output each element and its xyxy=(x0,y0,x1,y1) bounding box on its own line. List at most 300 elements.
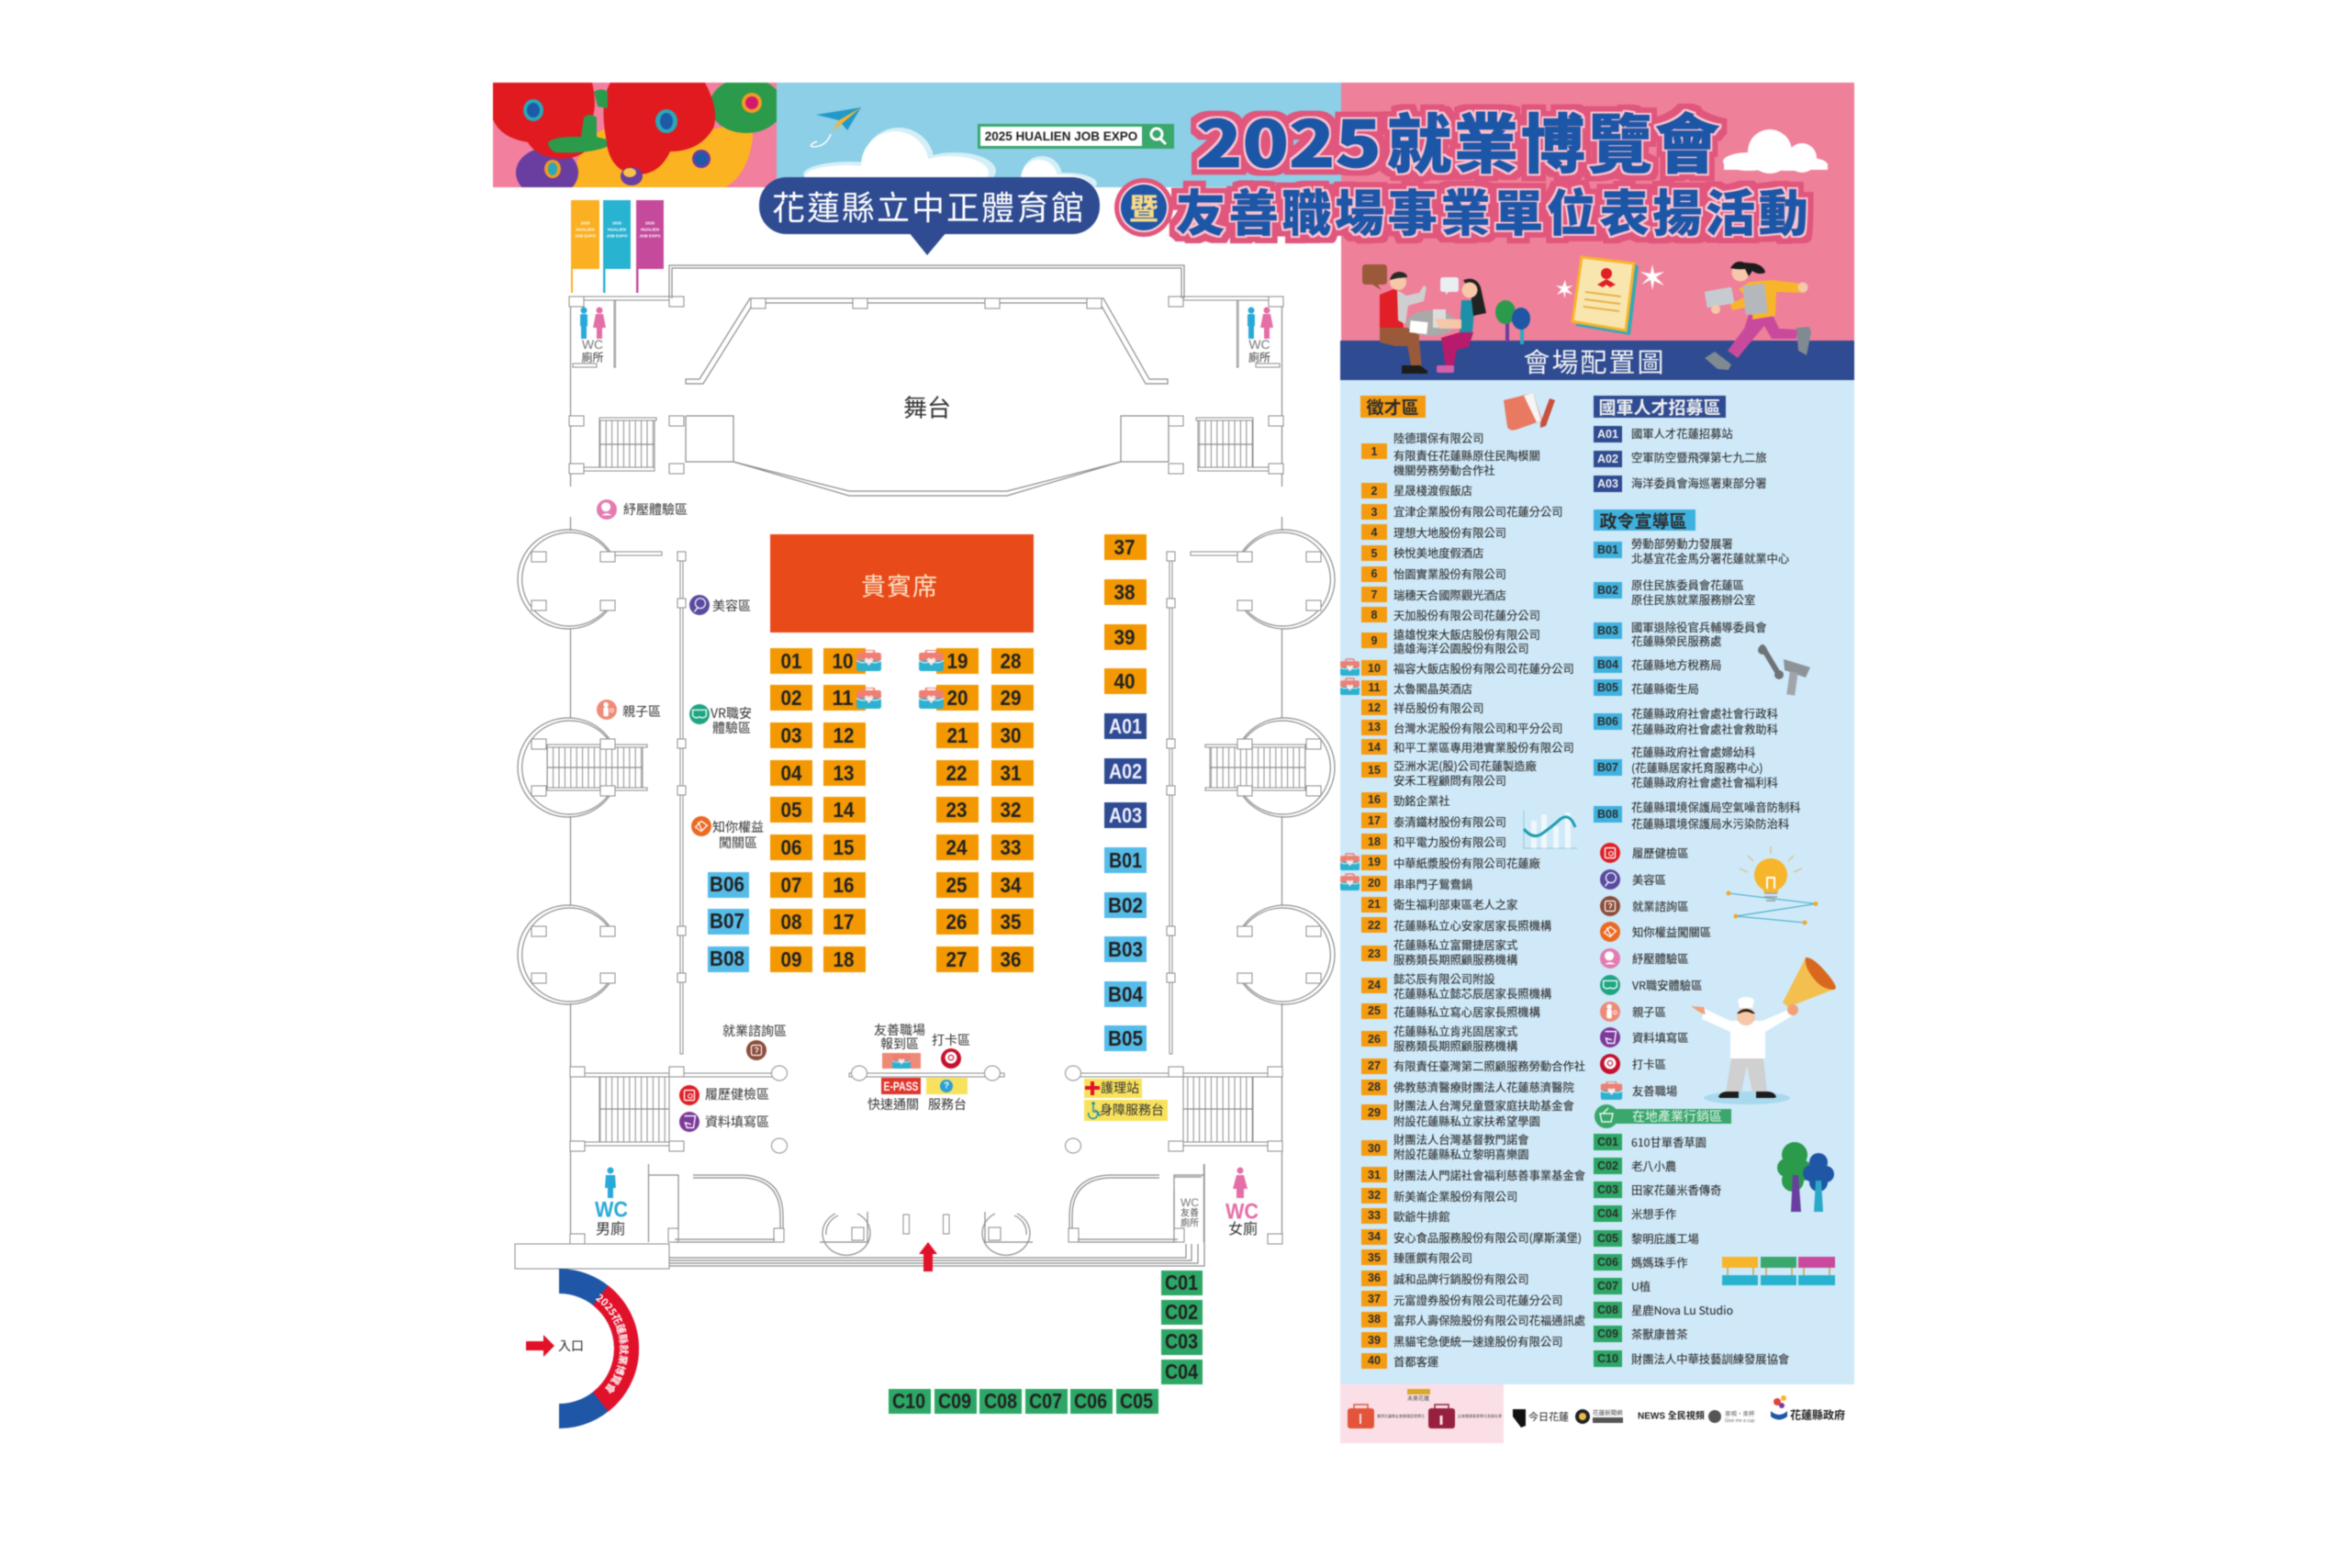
booths: column 3: 27 xyxy=(946,947,968,971)
booths: right column: A01 xyxy=(1109,714,1142,738)
VIP area xyxy=(770,534,1034,633)
title badge: 暨 xyxy=(1129,186,1158,229)
icon: clouds xyxy=(803,128,1097,199)
legend: rights: 知你權益闖關區 xyxy=(1632,924,1711,940)
company row 38: 富邦人壽保險股份有限公司花福通訊處 xyxy=(1393,1312,1585,1328)
front service counter xyxy=(849,1066,1004,1081)
company row 37: 37 xyxy=(1368,1293,1381,1305)
company row 6: 6 xyxy=(1371,567,1378,580)
flags: HUALIEN xyxy=(576,228,595,231)
navy band: 會場配置圖 xyxy=(1523,342,1666,380)
row B07: (花蓮縣居家托育服務中心) xyxy=(1631,759,1763,776)
flags: 2025 xyxy=(645,220,655,226)
icon label: check in xyxy=(932,1031,970,1069)
logo: NEWS: NEWS 全民視頻 xyxy=(1638,1410,1705,1421)
company row 24: 花蓮縣私立懿芯辰居家長照機構 xyxy=(1393,985,1551,1002)
row C09 xyxy=(1594,1326,1687,1342)
logo: give me a cup: 來唄・來杯 xyxy=(1725,1408,1755,1417)
booths: column 2: 14 xyxy=(834,798,855,822)
icon label: relax xyxy=(597,499,688,520)
legend: parent child: 親子區 xyxy=(1632,1003,1666,1020)
company row 25: 花蓮縣私立寫心居家長照機構 xyxy=(1393,1003,1540,1020)
booths: market horizontal: C09 xyxy=(938,1389,971,1413)
booths: column 4: 35 xyxy=(1001,910,1022,934)
icon: folder and pencil xyxy=(1504,393,1555,431)
legend: form: 資料填寫區 xyxy=(1632,1029,1689,1046)
icon: light bulb xyxy=(1726,846,1818,925)
booths: column 3: 23 xyxy=(946,798,968,822)
E-PASS: 快速通關 xyxy=(867,1095,919,1114)
icon label: parent child: 親子區 xyxy=(622,702,661,721)
booths: right column: 37 xyxy=(1114,535,1135,559)
company row 26: 26 xyxy=(1368,1033,1381,1046)
E-PASS xyxy=(867,1078,921,1114)
company row 9: 9 xyxy=(1371,634,1378,647)
booths: right column: 39 xyxy=(1114,625,1135,649)
company row 9: 遠雄悅來大飯店股份有限公司 xyxy=(1393,626,1540,643)
panel: list background xyxy=(1340,380,1854,1384)
heading: recruiting zone: 徵才區 xyxy=(1366,395,1419,419)
logo: give me a cup xyxy=(1708,1408,1755,1424)
row C06: 媽媽珠手作 xyxy=(1631,1254,1687,1271)
flags xyxy=(571,200,664,293)
company row 8: 天加股份有限公司花蓮分公司 xyxy=(1393,607,1540,623)
company row 4: 4 xyxy=(1371,526,1378,539)
company row 28: 28 xyxy=(1368,1081,1381,1093)
booths: right column: B01 xyxy=(1109,848,1142,872)
company row 18: 18 xyxy=(1368,835,1381,848)
company row 22: 22 xyxy=(1368,919,1381,932)
row B06: 花蓮縣政府社會處社會行政科 xyxy=(1631,705,1778,722)
booths: column 4: 33 xyxy=(1001,835,1021,859)
company row 24: 懿芯辰有限公司附設 xyxy=(1393,970,1495,987)
company row 12: 12 xyxy=(1368,701,1381,714)
booths: right column: 38 xyxy=(1114,580,1136,604)
row C05 xyxy=(1594,1230,1699,1247)
company row 11: 11 xyxy=(1368,681,1381,694)
row B01: 勞動部勞動力發展署 xyxy=(1631,535,1733,552)
booths: column 1: 06 xyxy=(780,835,802,859)
illustration: running woman xyxy=(1705,262,1811,370)
icon: WC top right xyxy=(1248,307,1273,339)
booths: column 3: 24 xyxy=(946,835,968,859)
icon: wrench and bolt xyxy=(1758,645,1810,696)
legend: friendly workplace: 友善職場 xyxy=(1632,1082,1677,1099)
title line 1: 就業博覽會 xyxy=(1387,94,1722,185)
company row 36: 誠和品牌行銷股份有限公司 xyxy=(1393,1271,1529,1287)
accessible restroom label xyxy=(1181,1196,1199,1228)
booths: column 3: 20 xyxy=(947,686,968,710)
booths: column 2: 12 xyxy=(834,723,854,747)
label: WC top left: 廁所 xyxy=(581,349,604,365)
booths: column 2: 11 xyxy=(832,686,854,710)
logo: Hualien News: 花蓮新聞網 xyxy=(1593,1407,1623,1417)
company row 11 xyxy=(1340,678,1472,697)
entrance arrow xyxy=(919,1242,937,1271)
row B03: 國軍退除役官兵輔導委員會 xyxy=(1631,619,1767,635)
company row 26: 花蓮縣私立肯兆固居家式 xyxy=(1393,1023,1517,1039)
company row 21: 衛生福利部東區老人之家 xyxy=(1393,896,1517,913)
company row 22: 花蓮縣私立心安家居家長照機構 xyxy=(1393,917,1551,934)
men's restroom xyxy=(595,1168,628,1238)
company row 29: 29 xyxy=(1368,1106,1381,1119)
search bar xyxy=(978,124,1174,149)
label: WC top right: 廁所 xyxy=(1248,349,1270,365)
logo: Hualien County Government xyxy=(1771,1395,1845,1423)
company row 1: 有限責任花蓮縣原住民陶模關 xyxy=(1393,447,1540,464)
company row 23: 服務類長期照顧服務機構 xyxy=(1393,951,1517,968)
company row 40: 首都客運 xyxy=(1393,1353,1438,1370)
row C03: 田家花蓮米香傳奇 xyxy=(1631,1182,1721,1198)
title badge xyxy=(1114,178,1173,237)
company row 32: 新美崙企業股份有限公司 xyxy=(1393,1188,1517,1204)
row C07 xyxy=(1594,1278,1651,1294)
icon label: rights: 知你權益 xyxy=(712,818,764,836)
row C01: C01 xyxy=(1597,1136,1618,1148)
company row 15 xyxy=(1361,757,1537,789)
illustration: consultation xyxy=(1362,264,1486,374)
company row 1: 機關勞務勞動合作社 xyxy=(1393,462,1495,478)
row C10: C10 xyxy=(1597,1352,1618,1365)
booths: right column: B05 xyxy=(1108,1026,1143,1050)
navy band xyxy=(1340,341,1854,380)
accessible restroom label: 友善 xyxy=(1181,1204,1199,1219)
company row 34: 安心食品服務股份有限公司(摩斯漢堡) xyxy=(1393,1229,1582,1246)
row C04: 米想手作 xyxy=(1631,1205,1676,1222)
icon label: beauty xyxy=(689,595,751,615)
company row 1: 1 xyxy=(1371,445,1378,458)
booths: column 4: 32 xyxy=(1001,798,1021,822)
caption: dark red case: 友善職場事業單位表揚名單 xyxy=(1458,1413,1502,1419)
row B02: 原住民族委員會花蓮區 xyxy=(1631,577,1744,593)
company row 17: 泰清鐵材股份有限公司 xyxy=(1393,813,1506,830)
icon: white cloud on pink xyxy=(1723,129,1828,174)
icon label: form xyxy=(679,1112,769,1132)
icon label: friendly check-in: 報到區 xyxy=(880,1035,919,1053)
logo: Hualien Today xyxy=(1513,1409,1569,1428)
legend: VR xyxy=(1600,975,1702,995)
accessibility desk: 身障服務台 xyxy=(1100,1101,1164,1119)
icon label: parent child xyxy=(597,700,661,721)
company row 30: 財團法人台灣基督教門諾會 xyxy=(1393,1131,1529,1148)
heading: local industry xyxy=(1595,1104,1731,1128)
company row 5: 秧悅美地度假酒店 xyxy=(1393,544,1483,561)
booths: market horizontal: C06 xyxy=(1074,1389,1107,1413)
icon: dark red case xyxy=(1428,1405,1455,1428)
logo: Taiwan xyxy=(1407,1389,1430,1403)
booths: column 4: 36 xyxy=(1001,947,1021,971)
row B08: B08 xyxy=(1597,808,1618,821)
booths: column 3 xyxy=(936,648,979,972)
icon label: VR xyxy=(689,704,752,737)
icon label: rights: 闖關區 xyxy=(719,834,757,852)
booths: market horizontal: C07 xyxy=(1029,1389,1062,1413)
company row 29 xyxy=(1361,1097,1574,1129)
flags: HUALIEN xyxy=(608,228,626,231)
accessible restroom label: WC xyxy=(1181,1196,1199,1209)
company row 39: 39 xyxy=(1368,1334,1381,1347)
entrance label: 入口 xyxy=(558,1337,584,1355)
booths: column 1: 03 xyxy=(780,723,802,747)
row C08: C08 xyxy=(1597,1304,1618,1316)
company row 30: 附設花蓮縣私立黎明喜樂園 xyxy=(1393,1146,1529,1162)
booths: column 1: 04 xyxy=(780,761,802,785)
company row 24 xyxy=(1361,970,1551,1002)
company row 13: 台灣水泥股份有限公司和平分公司 xyxy=(1393,720,1562,736)
company row 20: 20 xyxy=(1368,877,1381,890)
heading: local industry: 在地產業行銷區 xyxy=(1632,1107,1722,1126)
icon label: relax: 紓壓體驗區 xyxy=(623,500,688,519)
booths: column 1: 01 xyxy=(780,649,802,673)
row B03: B03 xyxy=(1597,624,1618,637)
flags: JOB EXPO xyxy=(639,233,661,239)
company row 33 xyxy=(1361,1208,1450,1225)
row C07: C07 xyxy=(1597,1280,1618,1293)
company row 6: 怡園實業股份有限公司 xyxy=(1393,566,1506,582)
row C07: U植 xyxy=(1631,1278,1651,1294)
row C04: C04 xyxy=(1597,1207,1618,1220)
row B07 xyxy=(1594,744,1778,790)
row B08 xyxy=(1594,799,1800,832)
row C10: 財團法人中華技藝訓練發展協會 xyxy=(1631,1350,1789,1367)
booths: column 1: 09 xyxy=(780,947,802,971)
row A01: A01 xyxy=(1597,428,1618,441)
booths: left B column: B08 xyxy=(710,946,744,970)
company row 19 xyxy=(1340,854,1540,871)
company row 37: 元富證券股份有限公司花蓮分公司 xyxy=(1393,1292,1562,1308)
row C01: 610甘單香草園 xyxy=(1631,1134,1707,1150)
legend: resume xyxy=(1600,843,1689,863)
back wall xyxy=(669,265,1184,298)
booths: column 1: 05 xyxy=(780,798,802,822)
booths: right column: A03 xyxy=(1109,803,1142,827)
booths: market vertical: C04 xyxy=(1165,1360,1198,1383)
booths: column 2: 15 xyxy=(834,835,855,859)
booths: column 3: 26 xyxy=(946,910,968,934)
row B06: B06 xyxy=(1597,715,1618,728)
logo: Hualien News xyxy=(1575,1407,1623,1424)
company row 9 xyxy=(1361,626,1540,656)
men's restroom: WC xyxy=(595,1197,628,1223)
legend: consult xyxy=(1600,896,1689,916)
company row 26: 服務類長期照顧服務機構 xyxy=(1393,1037,1517,1054)
booths: market horizontal: C05 xyxy=(1120,1389,1153,1413)
icon label: beauty: 美容區 xyxy=(712,597,751,615)
company row 11: 太魯閣晶英酒店 xyxy=(1393,680,1472,697)
booths: right column: B04 xyxy=(1108,982,1143,1006)
company row 32: 32 xyxy=(1368,1189,1381,1202)
icon label: friendly check-in: 友善職場 xyxy=(874,1021,925,1039)
booths: column 1: 02 xyxy=(780,686,802,710)
company row 7: 7 xyxy=(1371,588,1378,601)
floor plan structure xyxy=(515,265,1335,1271)
booths: column 1 xyxy=(770,648,812,972)
row A02: A02 xyxy=(1597,453,1618,465)
legend: resume: 履歷健檢區 xyxy=(1632,845,1689,861)
women's restroom: 女廁 xyxy=(1228,1216,1258,1238)
company row 39: 黑貓宅急便統一速達股份有限公司 xyxy=(1393,1333,1562,1350)
company row 40: 40 xyxy=(1368,1354,1381,1367)
company row 21: 21 xyxy=(1368,898,1381,911)
company row 14: 14 xyxy=(1368,741,1381,754)
illustration: small trees xyxy=(1495,300,1530,344)
icon label: check in: 打卡區 xyxy=(932,1031,970,1049)
row C02 xyxy=(1594,1158,1676,1174)
booths: market horizontal xyxy=(889,1389,1158,1414)
legend: check in xyxy=(1600,1054,1666,1074)
company row 28: 佛教慈濟醫療財團法人花蓮慈濟醫院 xyxy=(1393,1079,1574,1095)
illustration: certificate xyxy=(1572,257,1639,335)
stage label: 舞台 xyxy=(903,389,951,424)
company row 29: 附設花蓮縣私立家扶希望學園 xyxy=(1393,1113,1540,1129)
booths: column 2: 13 xyxy=(834,761,854,785)
company row 12: 祥岳股份有限公司 xyxy=(1393,700,1483,716)
booths: column 3: 21 xyxy=(947,723,968,747)
booths: column 4: 34 xyxy=(1001,873,1022,897)
row C05: C05 xyxy=(1597,1232,1618,1245)
booths: market horizontal: C10 xyxy=(892,1389,925,1413)
row C01 xyxy=(1594,1134,1707,1150)
service desk: 服務台 xyxy=(928,1095,967,1114)
company row 35: 35 xyxy=(1368,1251,1381,1264)
booths: column 3: 19 xyxy=(947,649,968,673)
company row 13: 13 xyxy=(1368,721,1381,734)
legend: relax: 紓壓體驗區 xyxy=(1632,950,1689,967)
company row 40 xyxy=(1361,1353,1438,1370)
icon: growth chart xyxy=(1524,811,1577,848)
company row 1 xyxy=(1361,430,1540,478)
legend: friendly workplace xyxy=(1601,1081,1677,1100)
booths: column 2: 16 xyxy=(834,873,854,897)
row B03: 花蓮縣榮民服務處 xyxy=(1631,633,1721,649)
venue speech bubble: 花蓮縣立中正體育館 xyxy=(772,182,1086,230)
flags: JOB EXPO xyxy=(606,233,628,239)
booths: left B column xyxy=(708,872,749,972)
company row 33: 33 xyxy=(1368,1209,1381,1222)
flags: 2025 xyxy=(580,220,590,226)
panel: sky banner xyxy=(777,83,1341,199)
row B07: 花蓮縣政府社會處社會福利科 xyxy=(1631,774,1778,790)
row B01: 北基宜花金馬分署花蓮就業中心 xyxy=(1631,550,1789,566)
flags: 2025 xyxy=(612,220,622,226)
company row 17: 17 xyxy=(1368,814,1381,827)
company row 8: 8 xyxy=(1371,609,1378,622)
icon label: friendly check-in xyxy=(874,1021,925,1069)
E-PASS: E-PASS xyxy=(883,1079,918,1093)
legend: consult: 就業諮詢區 xyxy=(1632,898,1689,914)
legend: form xyxy=(1600,1027,1689,1047)
company row 35: 臻匯饌有限公司 xyxy=(1393,1249,1472,1266)
panel: flower banner xyxy=(492,82,778,188)
booths: friendly workplace markers xyxy=(856,650,944,709)
label: WC top left xyxy=(581,337,604,365)
illustration: chef with megaphone xyxy=(1691,958,1836,1104)
company row 38: 38 xyxy=(1368,1313,1381,1326)
booths: right column: B03 xyxy=(1108,937,1143,961)
booths: column 1: 07 xyxy=(780,873,802,897)
footer: sponsors xyxy=(1340,1384,1504,1443)
row C06: C06 xyxy=(1597,1256,1618,1269)
men's restroom: 男廁 xyxy=(596,1216,625,1238)
row C05: 黎明庇護工場 xyxy=(1631,1230,1699,1247)
company row 16: 勁銘企業社 xyxy=(1393,792,1450,809)
row C08: 星鹿Nova Lu Studio xyxy=(1631,1302,1733,1318)
booths: column 4: 31 xyxy=(1001,761,1022,785)
booths: market vertical: C01 xyxy=(1165,1271,1198,1294)
icon label: VR: 體驗區 xyxy=(712,719,751,737)
booths: column 2: 17 xyxy=(834,910,854,934)
title line 1 xyxy=(1196,94,1722,185)
entrance gate xyxy=(558,1268,640,1429)
icon: sparkles xyxy=(1556,264,1664,298)
legend: parent child xyxy=(1600,1002,1666,1022)
row B05 xyxy=(1594,679,1699,697)
booths: column 2: 18 xyxy=(834,947,855,971)
title line 2: 友善職場事業單位表揚活動 xyxy=(1176,173,1811,246)
women's restroom: WC xyxy=(1225,1199,1259,1225)
company row 5: 5 xyxy=(1371,547,1378,560)
company row 14: 和平工業區專用港實業股份有限公司 xyxy=(1393,739,1574,756)
icon label: consult xyxy=(722,1022,787,1060)
row B08: 花蓮縣環境保護局空氣噪音防制科 xyxy=(1631,799,1800,815)
accessible restroom label: 廁所 xyxy=(1181,1215,1199,1228)
company row 24: 24 xyxy=(1368,979,1381,991)
booths: market vertical: C02 xyxy=(1165,1300,1198,1324)
row B06: 花蓮縣政府社會處社會救助科 xyxy=(1631,721,1778,737)
icon label: consult: 就業諮詢區 xyxy=(722,1022,787,1040)
company row 23 xyxy=(1361,936,1517,968)
legend: VR: VR職安體驗區 xyxy=(1632,977,1702,993)
booths: column 4: 28 xyxy=(1001,649,1022,673)
row C06 xyxy=(1594,1254,1687,1271)
company row 10: 10 xyxy=(1368,662,1381,675)
company row 23: 23 xyxy=(1368,947,1381,960)
booths: column 3: 25 xyxy=(946,873,968,897)
logo: give me a cup: Give me a cup xyxy=(1725,1418,1754,1424)
search bar: 2025 HUALIEN JOB EXPO xyxy=(985,129,1137,143)
company row 20: 串串門子鴛鴦鍋 xyxy=(1393,876,1472,892)
row B08: 花蓮縣環境保護局水污染防治科 xyxy=(1631,815,1789,832)
company row 30: 30 xyxy=(1368,1142,1381,1155)
row C09: 茶獸康普茶 xyxy=(1631,1326,1687,1342)
logo: Hualien Today: 今日花蓮 xyxy=(1528,1409,1569,1424)
legend: rights xyxy=(1600,922,1711,942)
company row 19: 中華紙漿股份有限公司花蓮廠 xyxy=(1393,855,1540,871)
booths: right column: B02 xyxy=(1108,893,1143,917)
company row 31: 財團法人門諾社會福利慈善事業基金會 xyxy=(1393,1167,1585,1183)
company row 7: 瑞穗天合國際觀光酒店 xyxy=(1393,587,1506,603)
service desk xyxy=(926,1078,968,1114)
row A01 xyxy=(1594,425,1733,442)
icon: paper plane xyxy=(811,107,861,147)
booths: column 3: 22 xyxy=(946,761,968,785)
icon label: rights xyxy=(691,816,764,852)
icon label: VR: VR職安 xyxy=(711,704,752,722)
legend: beauty xyxy=(1600,869,1666,890)
row B04: 花蓮縣地方稅務局 xyxy=(1631,656,1721,673)
company row 25: 25 xyxy=(1368,1004,1381,1017)
panel: pink header background xyxy=(1341,83,1854,342)
company row 20 xyxy=(1340,874,1472,892)
booths: right column: 40 xyxy=(1114,669,1135,693)
legend: beauty: 美容區 xyxy=(1632,871,1666,888)
row A03: A03 xyxy=(1597,477,1618,490)
company row 36: 36 xyxy=(1368,1271,1381,1284)
booths: column 1: 08 xyxy=(780,910,802,934)
icon label: resume: 履歷健檢區 xyxy=(705,1085,769,1103)
company row 15: 15 xyxy=(1368,764,1381,777)
heading: policy zone: 政令宣導區 xyxy=(1599,509,1687,532)
